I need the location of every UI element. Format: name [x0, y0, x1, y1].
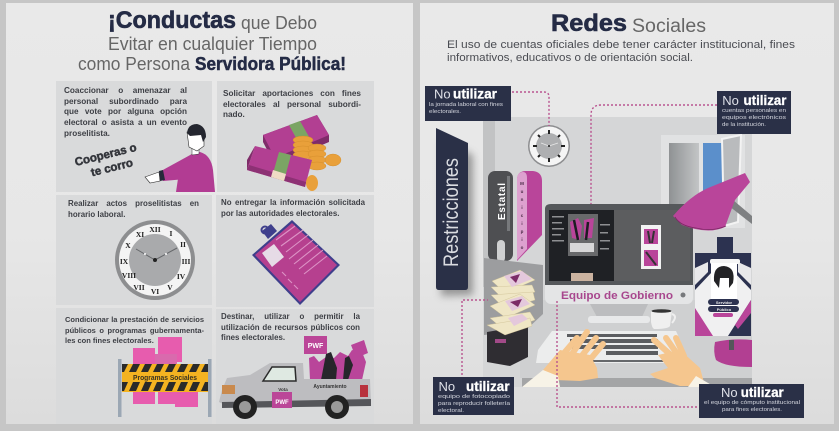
callout: equipo de computo: No: [721, 385, 738, 400]
icon: wall clock: [115, 220, 195, 300]
icon: pickup truck: Vota: [278, 387, 288, 392]
text: solicitar: nado.: [223, 110, 245, 119]
icon: clipboard: [252, 220, 340, 305]
text: no entregar: [221, 198, 365, 222]
icon: wall clock: XII: [149, 225, 161, 234]
text: condicionar: Condicionar la prestación de servicios: [65, 315, 204, 324]
icon: wall clock: VIII: [122, 271, 136, 280]
icon: keyboard: [536, 331, 681, 363]
icon: id badge: Servidor: [716, 300, 733, 305]
panel: restricciones: Restricciones: [440, 158, 463, 267]
panel: destinar: [216, 309, 374, 424]
text: cooperas o te corro: Cooperas o: [74, 142, 138, 169]
icon: shelf holder municipio: M: [520, 181, 524, 186]
title: conductas: que Debo: [241, 12, 317, 33]
panel: restricciones: [436, 128, 473, 296]
callout: jornada laboral: utilizar: [453, 86, 498, 102]
text: coaccionar: personal subordinado para: [64, 97, 187, 106]
callout: equipo de computo: el equipo de cómputo institucional: [704, 400, 800, 406]
icon: shelf holder municipio: n: [521, 197, 524, 202]
icon: shelf holder municipio: c: [521, 213, 524, 218]
panel: realizar actos: [56, 195, 212, 305]
callout: cuentas personales: utilizar: [744, 93, 787, 108]
callout: fotocopiado: para reproducir folletería: [438, 401, 511, 407]
icon: shelf holder estatal: [488, 171, 513, 262]
callout: cuentas personales: equipos electrónicos: [722, 115, 786, 121]
icon: shelf holder municipio: i: [521, 237, 523, 242]
icon: shelf holder municipio: u: [521, 189, 524, 194]
title: conductas: Evitar en cualquier Tiempo: [108, 33, 317, 54]
callout: fotocopiado: equipo de fotocopiado: [438, 394, 510, 400]
icon: shelf holder municipio: i: [521, 205, 523, 210]
icon: window: [661, 135, 745, 228]
text: cooperas o te corro: te corro: [90, 157, 134, 179]
text: condicionar: [65, 315, 204, 349]
text: condicionar: públicos o programas gubernamenta-: [65, 326, 204, 335]
title: conductas: Servidora Pública!: [195, 53, 346, 74]
icon: wall clock: VI: [151, 287, 159, 296]
text: intro paragraph: El uso de cuentas oficiales debe tener carácter institucional, fines: [447, 39, 796, 51]
text: intro paragraph: [447, 39, 796, 64]
icon: desk lamp: [673, 173, 752, 367]
icon: pickup truck: [219, 363, 371, 419]
text: coaccionar: [64, 86, 187, 142]
icon: monitor: [545, 204, 693, 323]
icon: boxes and barrier: [118, 337, 212, 417]
icon: typing hands: [522, 332, 715, 387]
title: conductas: como Persona: [78, 53, 191, 74]
title: redes sociales: Redes: [551, 10, 627, 37]
callout: jornada laboral: No: [434, 86, 451, 102]
panel: condicionar: [56, 308, 212, 424]
text: solicitar: Solicitar aportaciones con fines: [223, 89, 361, 98]
panel: solicitar aportaciones: [217, 81, 374, 192]
icon: pointing person: [145, 124, 215, 192]
panel: coaccionar: [56, 81, 215, 192]
icon: coffee cup: [651, 309, 675, 329]
icon: shelf holder estatal: Estatal: [497, 183, 508, 220]
text: coaccionar: Coaccionar o amenazar al: [64, 86, 187, 95]
icon: wall clock: XI: [136, 230, 144, 239]
callout: equipo de computo: para fines electorales.: [722, 407, 782, 413]
text: destinar: fines electorales.: [221, 333, 285, 342]
text: no entregar: No entregar la información solicitada: [221, 198, 365, 207]
text: solicitar: [223, 89, 361, 125]
icon: wall clock: III: [182, 257, 190, 266]
title: conductas: ¡Conductas: [108, 7, 236, 34]
icon: wall clock: IX: [120, 257, 129, 266]
text: realizar: horario laboral.: [68, 210, 125, 219]
icon: pickup truck: PWF: [275, 400, 289, 406]
callout: fotocopiado: [433, 377, 514, 415]
callout: jornada laboral: [425, 86, 511, 121]
icon: wall clock: I: [170, 229, 173, 238]
text: coaccionar: electoral o asista a un evento: [64, 118, 187, 127]
icon: money: [247, 115, 341, 191]
panel: left page: [6, 3, 413, 424]
title: redes sociales: Sociales: [632, 16, 706, 37]
callout: equipo de computo: utilizar: [741, 385, 784, 400]
icon: id badge: [695, 237, 751, 336]
icon: pickup truck: Ayuntamiento: [313, 384, 347, 390]
illustration: office scene: [483, 117, 752, 387]
icon: shelf holder municipio: [517, 171, 542, 261]
text: destinar: [221, 312, 360, 346]
icon: wall clock: VII: [133, 283, 145, 292]
callout: cuentas personales: [717, 91, 791, 134]
callout: cuentas personales: de la institución.: [722, 122, 766, 128]
text: realizar: Realizar actos proselitistas en: [68, 199, 199, 208]
text: coaccionar: que vote por alguna opción: [64, 107, 187, 116]
callout: cuentas personales: No: [722, 93, 739, 108]
title: conductas: [78, 7, 346, 74]
callout: jornada laboral: la jornada laboral con fines: [429, 102, 503, 108]
text: equipo de gobierno: Equipo de Gobierno: [561, 290, 673, 302]
callout: fotocopiado: No: [438, 379, 455, 394]
icon: wall clock: V: [167, 283, 173, 292]
icon: paper stack and box: [484, 258, 543, 366]
callout: cuentas personales: cuentas personales en: [722, 108, 786, 114]
text: realizar: [68, 199, 199, 223]
icon: shelf holder municipio: p: [521, 229, 524, 234]
icon: boxes and barrier: Programas Sociales: [133, 375, 197, 382]
callout: fotocopiado: utilizar: [466, 379, 510, 394]
text: solicitar: electorales al personal subordi-: [223, 100, 361, 109]
panel: no entregar: [216, 195, 374, 307]
text: no entregar: por las autoridades electorales.: [221, 209, 339, 218]
text: destinar: utilización de recursos públicos con: [221, 323, 360, 332]
text: cooperas o te corro: [74, 142, 141, 182]
icon: wall clock: II: [180, 240, 186, 249]
icon: wall clock: X: [125, 241, 131, 250]
icon: id badge: Público: [717, 307, 732, 312]
callout: fotocopiado: electoral.: [438, 408, 464, 414]
text: destinar: Destinar, utilizar o permitir la: [221, 312, 360, 321]
text: coaccionar: proselitista.: [64, 129, 110, 138]
panel: right page: [420, 3, 834, 424]
dotted connector lines: [462, 92, 717, 407]
callout: jornada laboral: electorales.: [429, 109, 461, 115]
text: condicionar: les con fines electorales.: [65, 336, 154, 345]
callout: equipo de computo: [699, 384, 804, 418]
icon: shelf holder municipio: o: [521, 245, 524, 250]
icon: protesters: [304, 336, 368, 380]
icon: wall clock small: [528, 125, 570, 167]
title: redes sociales: [551, 10, 706, 37]
icon: shelf holder municipio: i: [521, 221, 523, 226]
icon: protesters: PWF: [308, 343, 324, 350]
icon: wall clock: IV: [177, 272, 186, 281]
text: intro paragraph: informativos, educativos o de orientación social.: [447, 52, 693, 64]
